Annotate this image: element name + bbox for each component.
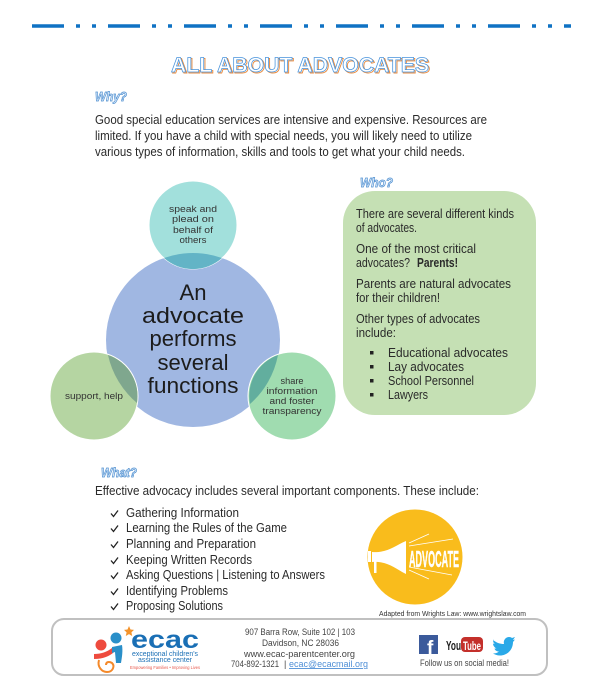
heading: why: Why? bbox=[95, 89, 127, 104]
text block: kinds of advocates: There are several different kinds bbox=[356, 207, 514, 221]
logo: ecac bbox=[94, 626, 201, 672]
logo: ecac: ecac bbox=[131, 626, 199, 654]
checklist: components bbox=[111, 506, 325, 613]
circle: share information: share bbox=[280, 376, 304, 386]
icon: facebook: f bbox=[427, 638, 434, 659]
logo: ecac: Empowering Families • Improving Lives bbox=[130, 665, 201, 670]
text block: kinds of advocates: include: bbox=[356, 326, 396, 340]
checklist: components: Proposing Solutions bbox=[126, 599, 223, 613]
circle: share information: information bbox=[266, 386, 318, 396]
icon: twitter bbox=[493, 637, 515, 656]
circle: speak and plead: speak and bbox=[169, 204, 217, 214]
contact details: www.ecac-parentcenter.org bbox=[243, 649, 355, 659]
icon: advocate megaphone bbox=[368, 510, 462, 604]
text block: kinds of advocates: of advocates. bbox=[356, 221, 417, 235]
text block: why: various types of information, skills and tools to get what your child needs. bbox=[95, 145, 465, 159]
icon: youtube: You bbox=[446, 638, 461, 653]
bullet list: advocate types: School Personnel bbox=[388, 374, 474, 388]
checklist: components: Planning and Preparation bbox=[126, 537, 256, 551]
text block: why: limited. If you have a child with special needs, you will likely need to utilize bbox=[95, 129, 472, 143]
heading: who: Who? bbox=[360, 175, 393, 190]
text block: kinds of advocates bbox=[356, 207, 514, 340]
contact details bbox=[231, 627, 368, 669]
heading: what: What? bbox=[101, 465, 137, 480]
contact details: 907 Barra Row, Suite 102 | 103 bbox=[245, 627, 355, 637]
text block: kinds of advocates: Parents! bbox=[417, 256, 458, 270]
title: ALL ABOUT ADVOCATES bbox=[172, 55, 430, 78]
central text bbox=[142, 280, 244, 398]
bullet list: advocate types: Lawyers bbox=[388, 388, 428, 402]
contact details: Davidson, NC 28036 bbox=[262, 638, 339, 648]
circle: share information bbox=[248, 352, 336, 440]
logo: ecac: exceptional children's bbox=[132, 651, 198, 658]
text block: kinds of advocates: One of the most critical bbox=[356, 242, 476, 256]
panel: who bbox=[343, 191, 536, 415]
text block: what intro: Effective advocacy includes several important components. These include: bbox=[95, 484, 479, 498]
circle: support, help: support, help bbox=[65, 391, 123, 401]
central text: performs bbox=[150, 326, 236, 351]
icon: ecac figures bbox=[94, 626, 134, 672]
text block: kinds of advocates: for their children! bbox=[356, 291, 440, 305]
contact details: | bbox=[284, 659, 286, 669]
logo: ecac: assistance center bbox=[138, 657, 193, 664]
contact details: ecac@ecacmail.org bbox=[289, 659, 368, 669]
circle: speak and plead: behalf of bbox=[173, 225, 214, 235]
icon: facebook bbox=[419, 635, 438, 659]
checklist: components: Learning the Rules of the Game bbox=[126, 521, 287, 535]
bullet list: advocate types: Educational advocates bbox=[388, 346, 508, 360]
checklist: components: Gathering Information bbox=[126, 506, 239, 520]
text block: kinds of advocates: Parents are natural advocates bbox=[356, 277, 511, 291]
central text: advocate bbox=[142, 303, 244, 328]
title: ALL ABOUT ADVOCATES bbox=[171, 54, 429, 77]
text block: why: Good special education services are intensive and expensive. Resources are bbox=[95, 113, 487, 127]
circle: speak and plead: plead on bbox=[172, 214, 214, 224]
circle: share information: and foster bbox=[270, 396, 314, 406]
caption: source: Adapted from Wrights Law: www.wrightslaw.com bbox=[379, 609, 526, 618]
icon: youtube: Tube bbox=[463, 639, 481, 653]
bullet list: advocate types: Lay advocates bbox=[388, 360, 464, 374]
checklist: components: Asking Questions | Listening to Answers bbox=[126, 568, 325, 582]
text: follow us: Follow us on social media! bbox=[420, 658, 509, 668]
central text: An bbox=[180, 280, 206, 305]
bullet list: advocate types bbox=[370, 346, 508, 402]
circle: speak and plead bbox=[148, 180, 238, 270]
venn diagram: advocate functions bbox=[50, 180, 336, 440]
text block: kinds of advocates: advocates? bbox=[356, 256, 410, 270]
icon: youtube bbox=[446, 637, 483, 653]
text block: why bbox=[95, 113, 487, 159]
circle: support, help bbox=[50, 352, 138, 440]
circle: speak and plead: others bbox=[180, 235, 207, 245]
circle: share information: transparency bbox=[262, 406, 322, 416]
central text: functions bbox=[148, 373, 238, 398]
contact details: 704-892-1321 bbox=[231, 659, 279, 669]
circle: central bbox=[106, 253, 280, 427]
checklist: components: Identifying Problems bbox=[126, 584, 228, 598]
text: ADVOCATE bbox=[409, 546, 459, 572]
footer panel bbox=[52, 619, 547, 675]
text block: kinds of advocates: Other types of advocates bbox=[356, 312, 480, 326]
central text: several bbox=[158, 350, 228, 375]
checklist: components: Keeping Written Records bbox=[126, 553, 252, 567]
